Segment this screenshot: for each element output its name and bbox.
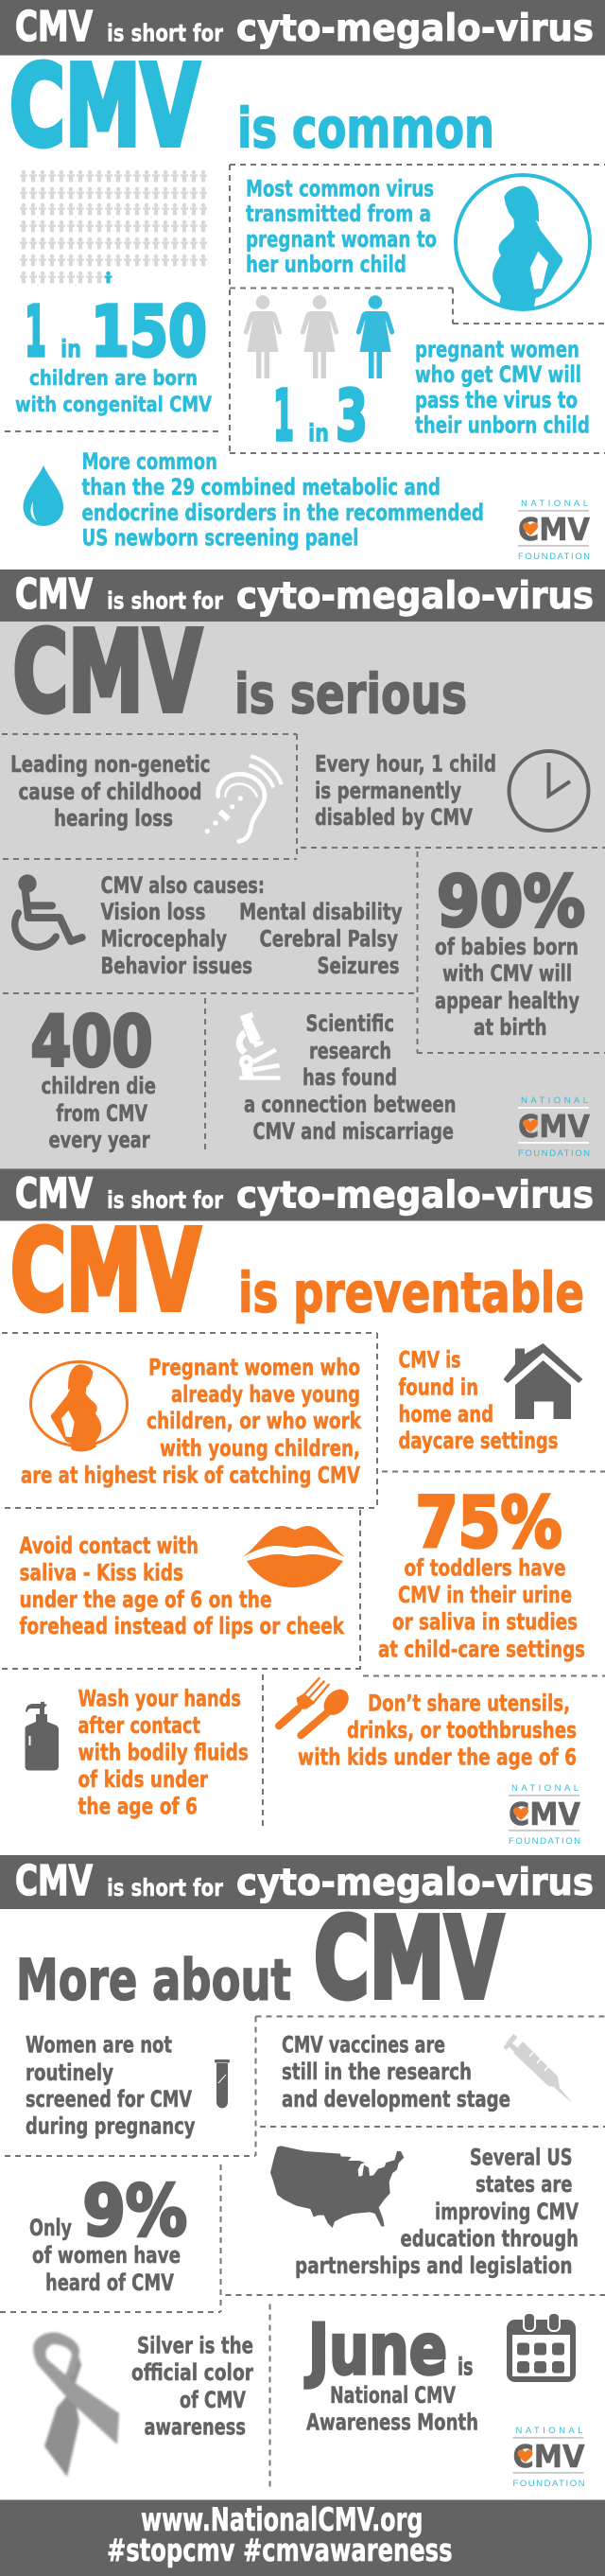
stat: only 9%: 9%	[83, 2170, 187, 2252]
text: wash your hands: with bodily fluids	[78, 1739, 249, 1765]
stat: 400: 400	[30, 1001, 153, 1082]
icons: three women	[244, 295, 394, 378]
text: women not screened	[26, 2032, 196, 2140]
heading: CMV is preventable	[10, 1205, 584, 1336]
stat: 1 in 3: in	[308, 420, 329, 448]
header bar: section 4	[0, 1855, 605, 1909]
footer bar: website and hashtags	[0, 2499, 605, 2576]
text: vaccines	[282, 2032, 510, 2112]
stat: 1 in 150: children are born	[29, 367, 198, 391]
heading: CMV is serious: is serious	[234, 662, 467, 727]
text: CMV also causes: Behavior issues	[100, 953, 252, 979]
text: several US states: states are	[475, 2171, 573, 2198]
stat: only 9%: heard of CMV	[45, 2269, 174, 2296]
text: CMV also causes: Cerebral Palsy	[259, 925, 398, 952]
text: hearing loss	[10, 751, 210, 832]
icon: house	[503, 1343, 582, 1419]
text: women not screened: routinely	[26, 2059, 113, 2086]
icon: microscope	[236, 1012, 281, 1080]
logo: National CMV Foundation: CMV	[509, 1796, 580, 1832]
icon: syringe	[503, 2034, 573, 2104]
text: women not screened: during pregnancy	[26, 2113, 196, 2140]
text: several US states: Several US	[470, 2144, 573, 2170]
heading: CMV is preventable: CMV	[10, 1205, 200, 1336]
text: more common	[81, 448, 484, 551]
text: every hour: disabled by CMV	[315, 804, 473, 831]
heading: CMV is common: is common	[237, 96, 494, 161]
icon: pregnant woman in circle	[456, 175, 590, 309]
text: every hour	[315, 751, 496, 831]
stat: 75%	[378, 1482, 585, 1663]
section background: is serious	[0, 570, 605, 1169]
header bar: section 3	[0, 1169, 605, 1220]
text: pregnant women at highest risk: already have young	[171, 1381, 360, 1408]
stat: 400: every year	[49, 1127, 150, 1153]
heading: More about CMV	[16, 1893, 503, 2024]
icon: drop	[23, 465, 63, 526]
text: more common: More common	[81, 448, 217, 475]
text: CMV also causes: Seizures	[318, 953, 399, 979]
stat: 1 in 150	[15, 291, 212, 417]
icon: silver ribbon	[33, 2332, 119, 2477]
header bar: section 1	[0, 0, 605, 55]
text: pregnant women at highest risk: children, or who work	[147, 1408, 362, 1434]
stat: 1 in 150: with congenital CMV	[15, 394, 212, 417]
text: CMV also causes: Vision loss	[100, 899, 206, 925]
text: wash your hands: Wash your hands	[78, 1686, 241, 1712]
logo: National CMV Foundation	[518, 499, 590, 562]
stat: only 9%: of women have	[32, 2242, 181, 2269]
header bar: section 4: is short for	[107, 1874, 224, 1901]
heading: More about CMV: CMV	[314, 1893, 503, 2024]
text: vaccines: still in the research	[282, 2059, 472, 2085]
text: more common: than the 29 combined metabolic and	[81, 474, 441, 500]
text: June is awareness month: National CMV	[330, 2382, 456, 2409]
text: women not screened: screened for CMV	[26, 2086, 192, 2112]
text: CMV also causes: Microcephaly	[100, 925, 227, 952]
logo: National CMV Foundation: CMV	[512, 2438, 585, 2475]
text: June is awareness month: June	[304, 2309, 447, 2391]
text: June is awareness month	[304, 2309, 478, 2435]
text: scientific research	[244, 1010, 456, 1145]
text: wash your hands	[78, 1686, 249, 1820]
stat: 75%: 75%	[416, 1482, 562, 1564]
text: avoid contact with saliva: saliva - Kiss kids	[19, 1559, 183, 1586]
text: avoid contact with saliva: forehead instead of lips or cheek	[19, 1613, 345, 1639]
stat: 90%: 90%	[437, 861, 585, 942]
stat: 1 in 3: 1	[273, 376, 294, 457]
text: every hour: is permanently	[315, 778, 461, 804]
icon: soap bottle	[25, 1702, 59, 1771]
text: several US states	[295, 2144, 579, 2279]
text: pregnant women at highest risk	[21, 1355, 362, 1489]
text: June is awareness month: is	[458, 2354, 473, 2382]
text: avoid contact with saliva: under the age of 6 on the	[19, 1586, 272, 1613]
header bar: section 2: is short for	[107, 587, 224, 615]
text: scientific research: has found	[302, 1064, 397, 1091]
stat: only 9%: Only	[29, 2215, 72, 2241]
stat: 1 in 150: 1	[25, 291, 46, 373]
text: found in home: found in	[399, 1374, 478, 1400]
heading: CMV is serious	[13, 606, 467, 737]
header bar: section 3: cyto-megalo-virus	[236, 1175, 594, 1217]
header bar: section 2: cyto-megalo-virus	[236, 575, 594, 618]
text: vaccines: CMV vaccines are	[282, 2032, 445, 2059]
text: every hour: Every hour, 1 child	[315, 751, 496, 778]
text: wash your hands: of kids under	[78, 1766, 208, 1793]
text: women not screened: Women are not	[26, 2032, 172, 2059]
icon: calendar	[507, 2313, 576, 2382]
panel: More about CMV	[16, 1893, 579, 2477]
header bar: section 2: CMV	[15, 570, 93, 619]
text: CMV also causes	[100, 872, 403, 979]
stat: 90%	[435, 861, 585, 1041]
logo: National CMV Foundation	[518, 1095, 590, 1159]
logo: National CMV Foundation: NATIONAL	[521, 1095, 588, 1106]
header bar: section 4: cyto-megalo-virus	[236, 1862, 594, 1904]
logo: National CMV Foundation: FOUNDATION	[512, 2479, 585, 2489]
text: don't share utensils	[298, 1690, 577, 1771]
header bar: section 1: is short for	[107, 19, 224, 47]
text: found in home: home and	[399, 1401, 493, 1428]
header bar: section 3: CMV	[15, 1169, 93, 1218]
heading: CMV is common: CMV	[9, 41, 199, 171]
text: found in home: CMV is	[399, 1347, 461, 1374]
text: wash your hands: after contact	[78, 1712, 200, 1739]
text: CMV also causes: Mental disability	[239, 899, 403, 925]
text: June is awareness month: Awareness Month	[306, 2409, 478, 2435]
text: most common virus: her unborn child	[246, 252, 406, 278]
text: silver color	[131, 2333, 253, 2441]
text: more common: endocrine disorders in the recommended	[81, 499, 484, 526]
stat: 1 in 150: 150	[91, 291, 207, 373]
text: pregnant women at highest risk: are at highest risk of catching CMV	[21, 1463, 360, 1489]
logo: National CMV Foundation: FOUNDATION	[518, 552, 590, 562]
header bar: section 4: CMV	[15, 1857, 93, 1905]
text: scientific research: Scientific	[306, 1010, 394, 1037]
header bar: section 2	[0, 570, 605, 622]
logo: National CMV Foundation: CMV	[518, 1108, 590, 1145]
text: avoid contact with saliva	[19, 1533, 345, 1639]
stat: 400	[30, 1001, 156, 1153]
icon: US map	[270, 2146, 404, 2228]
icon: ear	[205, 756, 282, 841]
text: scientific research: a connection between	[244, 1092, 456, 1118]
stat: 1 in 3	[273, 376, 368, 457]
heading: CMV is common	[9, 41, 494, 171]
text: hearing loss: hearing loss	[54, 805, 173, 832]
text: silver color: Silver is the	[137, 2333, 253, 2359]
logo: National CMV Foundation: NATIONAL	[516, 2426, 582, 2436]
stat: 90%: at birth	[474, 1014, 546, 1041]
icon: fork and spoon	[279, 1677, 354, 1735]
icon: wheelchair	[15, 874, 82, 947]
text: avoid contact with saliva: Avoid contact with	[19, 1533, 199, 1559]
panel: CMV is serious	[10, 606, 588, 1153]
stat: 1 in 150: in	[60, 335, 81, 363]
chart: 1 in 150 children pictogram	[20, 170, 207, 283]
footer bar: website and hashtags: www.NationalCMV.org	[141, 2501, 424, 2539]
text: silver color: of CMV	[180, 2387, 246, 2413]
panel: CMV is common	[9, 41, 590, 551]
footer bar: website and hashtags: #stopcmv #cmvawareness	[107, 2532, 452, 2568]
text: most common virus: Most common virus	[246, 176, 434, 202]
stat: 1 in 3: 3	[336, 376, 368, 457]
text: pregnant women at highest risk: with young children,	[160, 1435, 360, 1462]
header bar: section 1: cyto-megalo-virus	[236, 8, 594, 50]
icon: clock	[509, 751, 588, 831]
logo: National CMV Foundation: CMV	[518, 511, 590, 548]
logo: National CMV Foundation: FOUNDATION	[518, 1148, 590, 1159]
panel: CMV is preventable	[10, 1205, 585, 1820]
icon: pregnant woman in oval	[30, 1362, 127, 1451]
text: pregnant women pass virus	[415, 337, 590, 439]
text: hearing loss: cause of childhood	[19, 779, 202, 805]
text: silver color: official color	[131, 2359, 253, 2386]
heading: CMV is serious: CMV	[13, 606, 202, 737]
stat: 400: from CMV	[57, 1100, 147, 1127]
text: found in home	[399, 1347, 558, 1454]
logo: National CMV Foundation: FOUNDATION	[509, 1836, 580, 1847]
header bar: section 1: CMV	[15, 3, 93, 51]
stat: only 9%	[29, 2170, 187, 2296]
stat: 400: children die	[42, 1073, 156, 1099]
text: scientific research: research	[309, 1038, 391, 1064]
text: wash your hands: the age of 6	[78, 1794, 198, 1820]
heading: More about CMV: More about	[16, 1947, 291, 2013]
logo: National CMV Foundation	[509, 1783, 580, 1847]
text: silver color: awareness	[144, 2414, 246, 2441]
text: most common virus	[246, 176, 437, 278]
text: most common virus: pregnant woman to	[246, 226, 437, 253]
icon: test tube	[215, 2059, 230, 2108]
text: scientific research: CMV and miscarriage	[253, 1118, 454, 1145]
text: CMV also causes: CMV also causes:	[100, 872, 265, 899]
text: more common: US newborn screening panel	[81, 524, 359, 551]
logo: National CMV Foundation: NATIONAL	[511, 1783, 579, 1794]
text: most common virus: transmitted from a	[246, 201, 431, 227]
text: vaccines: and development stage	[282, 2086, 510, 2112]
text: hearing loss: Leading non-genetic	[10, 751, 210, 778]
icon: lips	[242, 1526, 345, 1587]
text: pregnant women at highest risk: Pregnant women who	[148, 1355, 360, 1381]
logo: National CMV Foundation: NATIONAL	[521, 499, 588, 509]
logo: National CMV Foundation	[512, 2426, 585, 2489]
header bar: section 3: is short for	[107, 1186, 224, 1214]
